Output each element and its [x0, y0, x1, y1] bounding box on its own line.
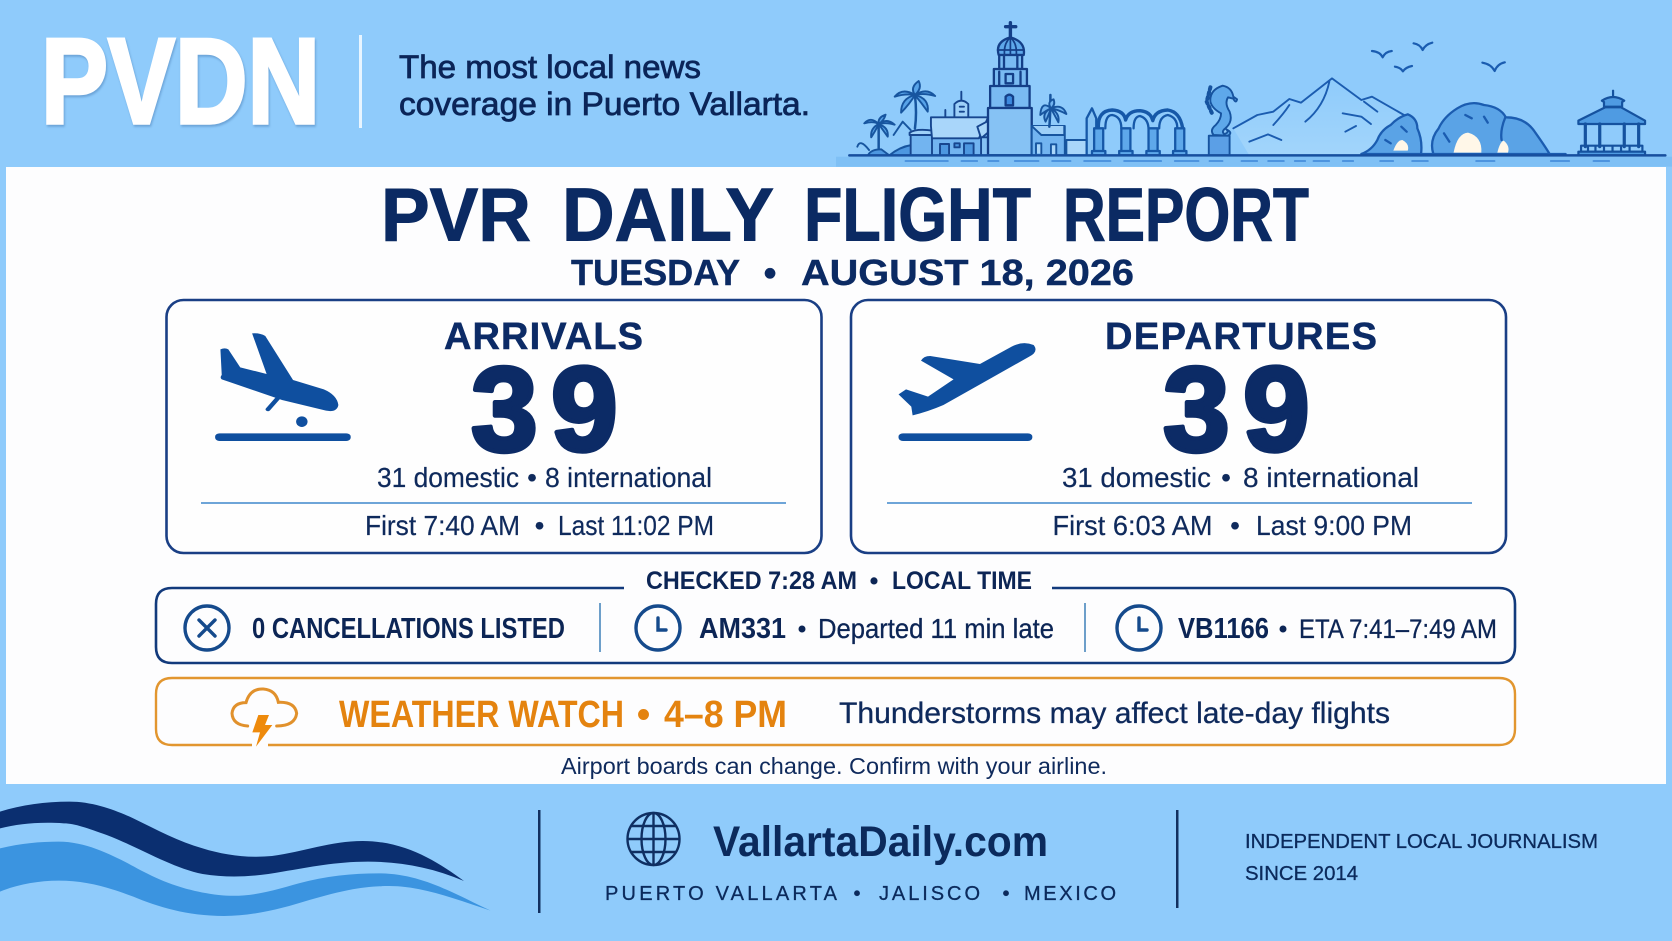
- independent journalism note: SINCE 2014: [1245, 862, 1358, 885]
- illustration: Puerto Vallarta skyline: [836, 23, 1672, 167]
- arrivals count: 9: [551, 342, 618, 476]
- departures first and last: [1052, 510, 1412, 541]
- arrivals first and last: First 7:40 AM: [365, 510, 520, 541]
- gazebo: [1578, 91, 1645, 155]
- arrivals first and last: •: [535, 510, 544, 541]
- disclaimer: Airport boards can change. Confirm with your airline.: [561, 753, 1107, 779]
- icon: landing plane: [215, 333, 351, 441]
- departures breakdown: •: [1221, 462, 1231, 493]
- cancellations: 0 CANCELLATIONS LISTED: [252, 613, 565, 645]
- location line: •: [1002, 883, 1010, 905]
- date: TUESDAY: [571, 252, 740, 293]
- bell tower: [988, 23, 1032, 155]
- arrivals first and last: Last 11:02 PM: [558, 510, 714, 541]
- location line: [605, 883, 1116, 905]
- weather detail: Thunderstorms may affect late-day flights: [839, 697, 1390, 730]
- tagline: coverage in Puerto Vallarta.: [399, 86, 810, 122]
- icon: clock: [636, 606, 680, 650]
- date: [571, 252, 1134, 293]
- main white panel: [6, 167, 1666, 784]
- church building: [910, 92, 1015, 155]
- title: PVR: [381, 172, 531, 256]
- mountain: [1233, 78, 1404, 155]
- shoreline: [849, 155, 1665, 161]
- arriving flight: [1178, 613, 1497, 645]
- los arcos rocks: [1361, 103, 1566, 154]
- delayed departure: AM331: [699, 613, 786, 645]
- arrivals breakdown: 8 international: [545, 462, 712, 493]
- tagline: The most local news: [399, 49, 701, 85]
- icon: globe: [628, 813, 680, 865]
- independent journalism note: INDEPENDENT LOCAL JOURNALISM: [1245, 830, 1598, 853]
- title: FLIGHT: [804, 172, 1031, 256]
- departures count: 3: [1163, 342, 1230, 476]
- checked time label: •: [870, 567, 878, 595]
- departures first and last: Last 9:00 PM: [1256, 510, 1412, 541]
- header: masthead: [41, 13, 810, 149]
- logo: PVDN: PVDN: [41, 13, 320, 149]
- checked time label: CHECKED 7:28 AM: [646, 567, 857, 595]
- arrivals breakdown: •: [527, 462, 537, 493]
- icon: clock: [1117, 606, 1161, 650]
- departures count: 9: [1243, 342, 1310, 476]
- departures breakdown: 31 domestic: [1062, 462, 1211, 493]
- website: VallartaDaily.com: [713, 818, 1048, 866]
- location line: MEXICO: [1024, 883, 1116, 905]
- seahorse statue: [1207, 86, 1237, 155]
- footer: [0, 802, 1598, 916]
- departures breakdown: [1062, 462, 1419, 493]
- arrivals breakdown: [377, 462, 712, 493]
- heading: departures: DEPARTURES: [1105, 316, 1377, 358]
- checked time label: LOCAL TIME: [892, 567, 1032, 595]
- location line: JALISCO: [879, 883, 980, 905]
- left palms: [857, 81, 935, 155]
- arriving flight: ETA 7:41–7:49 AM: [1299, 614, 1497, 644]
- icon: takeoff plane: [899, 343, 1036, 441]
- departures breakdown: 8 international: [1243, 462, 1419, 493]
- checked time label: [646, 567, 1032, 595]
- arrivals count: 3: [471, 342, 538, 476]
- date: AUGUST 18, 2026: [801, 252, 1134, 293]
- weather heading: WEATHER WATCH: [339, 694, 624, 736]
- location line: •: [853, 883, 861, 905]
- independent journalism note: [1245, 830, 1598, 885]
- right chapel and palm: [1032, 95, 1088, 155]
- icon: storm cloud: [232, 689, 297, 747]
- departures first and last: •: [1230, 510, 1240, 541]
- heading: arrivals: ARRIVALS: [444, 316, 643, 358]
- birds: [1372, 43, 1505, 71]
- panel: status bar: [156, 567, 1515, 663]
- tagline: [399, 49, 810, 122]
- date: •: [764, 252, 776, 293]
- departures first and last: First 6:03 AM: [1052, 510, 1212, 541]
- weather heading: 4–8 PM: [664, 694, 787, 736]
- arrivals first and last: [365, 510, 714, 541]
- delayed departure: Departed 11 min late: [818, 613, 1054, 644]
- arrivals breakdown: 31 domestic: [377, 462, 519, 493]
- weather heading: •: [637, 694, 650, 736]
- location line: PUERTO VALLARTA: [605, 883, 838, 905]
- arriving flight: VB1166: [1178, 613, 1269, 645]
- title: DAILY: [562, 172, 774, 256]
- malecon arches: [1087, 108, 1186, 155]
- title: REPORT: [1063, 172, 1309, 256]
- waves: [0, 802, 491, 916]
- panel: weather watch: [156, 678, 1515, 747]
- icon: cancelled: [185, 606, 229, 650]
- panel: departures: [851, 300, 1506, 553]
- delayed departure: [699, 613, 1054, 645]
- title: [381, 172, 1309, 256]
- panel: arrivals: [166, 300, 822, 553]
